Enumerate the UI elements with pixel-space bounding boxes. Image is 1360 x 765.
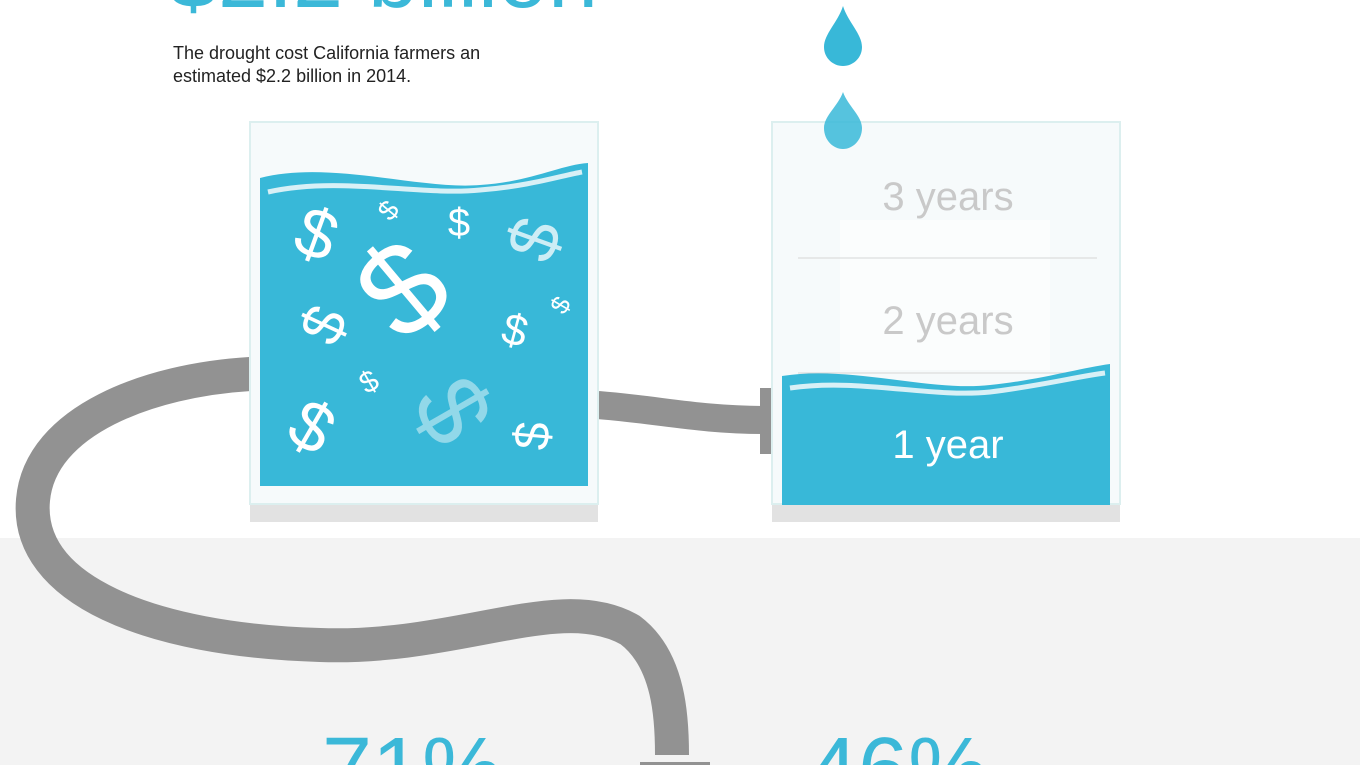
dollar signs: $: [491, 208, 577, 271]
tank: years: [772, 122, 1120, 522]
hose: connecting tanks: [598, 405, 765, 420]
dollar signs: $: [497, 304, 533, 357]
dollar signs: $: [285, 190, 348, 277]
icon: water drops: [824, 6, 862, 149]
hose connector: [760, 388, 771, 454]
label: 2 years: 2 years: [882, 299, 1014, 343]
hose: left: [33, 374, 672, 755]
label: 3 years: 3 years: [882, 175, 1014, 219]
description text: estimated $2.2 billion in 2014.: [173, 66, 411, 86]
dollar signs: $: [286, 296, 361, 354]
dollar signs: $: [390, 358, 515, 463]
dollar signs: $: [544, 291, 577, 319]
description text: [173, 43, 480, 86]
description text: The drought cost California farmers an: [173, 43, 480, 63]
dollar signs: $: [354, 364, 385, 401]
dollar signs: $: [328, 209, 477, 368]
hose end connector: [640, 762, 710, 765]
label: 1 year: 1 year: [892, 423, 1004, 467]
tank: money: [250, 122, 598, 522]
dollar signs: $: [276, 383, 348, 470]
dollar signs: $: [448, 201, 470, 245]
dollar signs: [276, 190, 577, 470]
dollar signs: $: [372, 194, 406, 226]
dollar signs: $: [503, 419, 561, 452]
